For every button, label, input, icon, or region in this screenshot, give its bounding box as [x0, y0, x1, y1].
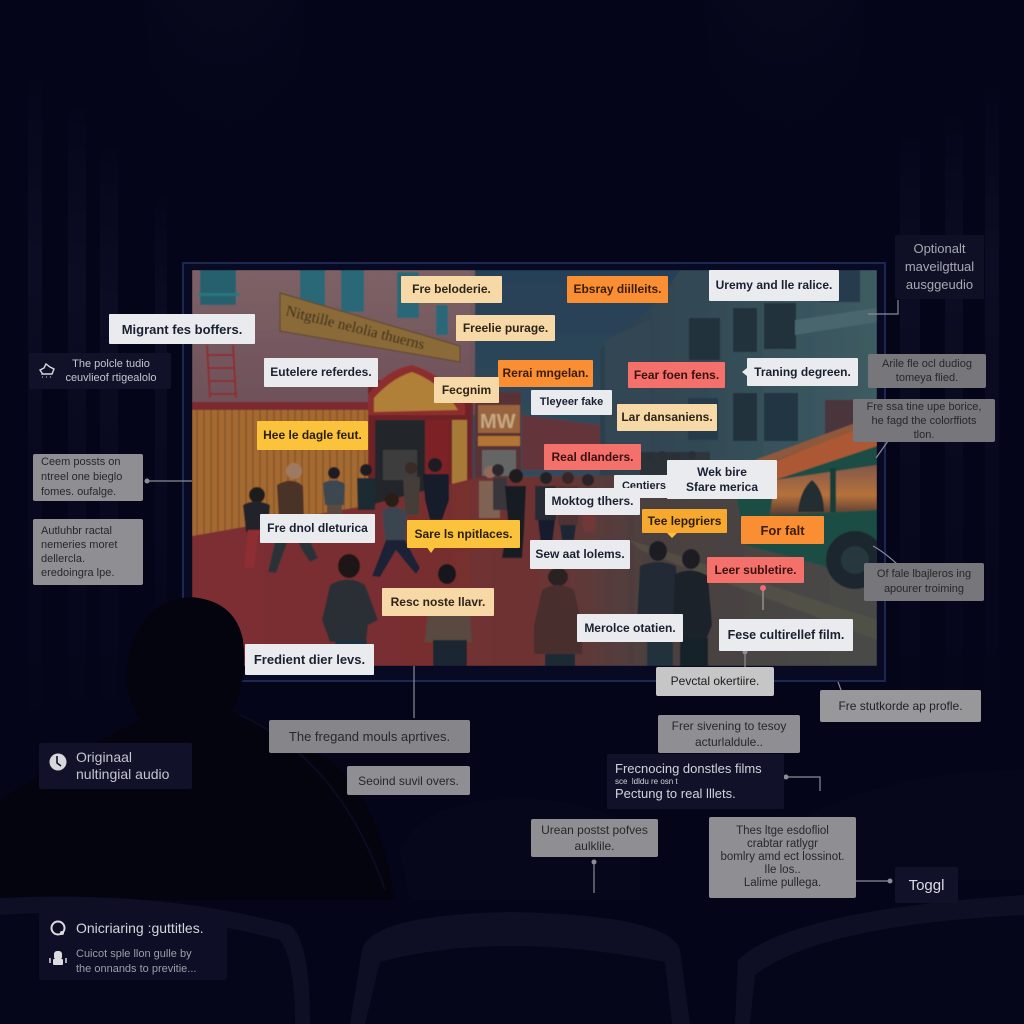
label: eutelere: [264, 358, 378, 387]
ground: [192, 470, 877, 666]
card: ceem: fomes. oufalge.: [41, 486, 116, 498]
icon: audio cloud: [39, 362, 55, 378]
label: resc: [382, 588, 494, 616]
card: thes: crabtar ratlygr: [747, 838, 818, 850]
label: leer: Leer subletire.: [714, 562, 797, 576]
icon: search ring: [50, 920, 66, 936]
label: lar: Lar dansaniens.: [621, 410, 713, 424]
card: ceem: [33, 454, 143, 501]
card: of fale: apourer troiming: [884, 583, 964, 595]
label: lar: [617, 404, 717, 431]
card: autluhbr: Autluhbr ractal: [41, 525, 112, 537]
theatre entrance: [368, 380, 474, 485]
pink building haze: [522, 415, 600, 470]
label: fecgnim: Fecgnim: [442, 382, 491, 396]
card: of fale: [864, 563, 984, 601]
label: fear: Fear foen fens.: [634, 368, 719, 382]
label: migrant: [109, 314, 255, 344]
icon: microphone: [49, 951, 67, 965]
label: sare: [407, 520, 520, 548]
label: eutelere: Eutelere referdes.: [270, 365, 372, 379]
card: thes: Thes ltge esdofliol: [736, 825, 829, 837]
label: fredient: [245, 644, 374, 675]
label: traning: [747, 358, 858, 386]
label: resc: Resc noste llavr.: [391, 594, 485, 608]
street sign: [280, 293, 460, 362]
label: ebsray: [567, 276, 668, 303]
label: for falt: For falt: [760, 522, 805, 538]
card: original audio: [39, 743, 192, 789]
panel: cinema screen with street scene: [182, 262, 886, 682]
label: sew: [530, 540, 630, 569]
card: fre ssa: tlon.: [914, 428, 934, 440]
label: sew: Sew aat lolems.: [535, 547, 625, 561]
label: merolce: Merolce otatien.: [584, 620, 676, 634]
card: urean: Urean postst pofves: [541, 823, 648, 837]
label: rerai: Rerai mngelan.: [502, 366, 589, 380]
card: stutkorde: [820, 690, 981, 722]
label: beloderie: Fre beloderie.: [412, 282, 491, 296]
card: fre ssa: [853, 399, 995, 442]
card: polcle audio: ceuvlieof rtigealolo: [65, 372, 157, 384]
card: pevctal: Pevctal okertiire.: [671, 674, 759, 688]
card: thes: bomlry amd ect lossinot.: [720, 851, 844, 863]
label: fecgnim: [434, 377, 499, 403]
bus: [735, 415, 884, 590]
card: thes: Ile los..: [764, 864, 801, 876]
card: of fale: Of fale lbajleros ing: [877, 568, 971, 580]
text: cuicot: [76, 948, 196, 975]
card: optionalt: ausggeudio: [906, 277, 973, 292]
label: tleyeer: [531, 390, 612, 415]
label: hee: [257, 421, 368, 450]
card: toggl: Toggl: [909, 876, 944, 894]
label: real: Real dlanders.: [551, 450, 634, 464]
card: thes: [709, 817, 856, 898]
card: thes: Lalime pullega.: [744, 877, 821, 889]
label: wek bire: Sfare merica: [686, 480, 758, 494]
label: tee: [642, 509, 727, 533]
label: leer: [707, 557, 804, 583]
label: migrant: Migrant fes boffers.: [122, 322, 242, 336]
label: traning: Traning degreen.: [754, 364, 851, 378]
card: stutkorde: Fre stutkorde ap profle.: [838, 698, 963, 712]
card: autluhbr: eredoingra lpe.: [41, 567, 114, 579]
card: second: [347, 766, 470, 795]
label: sare: Sare ls npitlaces.: [414, 526, 513, 540]
card: pevctal: [656, 667, 774, 696]
label: wek bire: [667, 460, 777, 499]
label: fredient: Fredient dier levs.: [254, 652, 365, 667]
card: fregand: The fregand mouls aprtives.: [289, 728, 450, 744]
label: fese: Fese cultirellef film.: [728, 628, 844, 642]
card: autluhbr: nemeries moret: [41, 539, 117, 551]
card: urean: [531, 819, 658, 857]
card: sivening: Frer sivening to tesoy: [672, 719, 786, 733]
card: autluhbr: dellercla.: [41, 553, 85, 565]
card: fre ssa: Fre ssa tine upe borice,: [867, 400, 981, 412]
corrugated wall: [192, 402, 368, 410]
card: arile: Arile fle ocl dudiog: [882, 358, 972, 370]
card: optionalt: maveilgttual: [905, 259, 974, 274]
label: ebsray: Ebsray diilleits.: [573, 282, 662, 296]
label: fear: [628, 362, 725, 388]
heading: oncriaring: Onicriaring :guttitles.: [76, 920, 204, 936]
label: fese: [719, 619, 853, 651]
card: optionalt: Optionalt: [913, 241, 966, 256]
card: sivening: [658, 715, 800, 753]
card: ceem: Ceem possts on: [41, 456, 120, 468]
label: freelie: Freelie purage.: [463, 320, 548, 334]
label: freelie: [456, 315, 555, 341]
pedestrians: [243, 458, 712, 666]
card: frecnocing: [607, 754, 784, 809]
right building: [600, 270, 877, 480]
card: arile: [868, 354, 986, 388]
card: fregand: [269, 720, 470, 753]
label: rerai: [498, 360, 593, 387]
card: original audio: Originaal: [76, 749, 132, 765]
label: moktog: Moktog tlhers.: [551, 494, 634, 508]
card: ceem: ntreel one bieglo: [41, 471, 122, 483]
card: frecnocing: Frecnocing donstles films: [615, 761, 762, 776]
card: sivening: acturlaldule..: [695, 735, 763, 749]
label: merolce: [577, 614, 683, 642]
label: hee: Hee le dagle feut.: [263, 428, 362, 442]
card: subtitles: [39, 912, 227, 980]
panel: cinema screen with street scene: MW: [480, 411, 516, 433]
card: urean: aulklile.: [574, 839, 614, 853]
label: moktog: [545, 488, 640, 515]
label: uremy: Uremy and lle ralice.: [716, 278, 832, 292]
label: uremy: [709, 270, 839, 301]
second theatre: [475, 392, 521, 482]
text: cuicot: the onnands to previtie...: [76, 963, 196, 975]
left building: [192, 270, 475, 415]
card: frecnocing: sce ldldu re osn t: [615, 777, 678, 786]
label: wek bire: Wek bire: [697, 464, 747, 478]
label: tleyeer: Tleyeer fake: [540, 396, 603, 408]
distant crowd: [640, 451, 710, 477]
street sign: Nitgtille nelolia thuerns: [284, 303, 426, 353]
icon: clock: [50, 754, 66, 770]
card: autluhbr: [33, 519, 143, 585]
label: beloderie: [401, 276, 502, 303]
card: fre ssa: he fagd the colorffiots: [872, 414, 976, 426]
label: centiers: Centiers: [622, 480, 666, 492]
label: real: [544, 444, 641, 470]
card: original audio: nultingial audio: [76, 766, 169, 782]
label: for falt: [741, 516, 824, 544]
card: polcle audio: [29, 353, 171, 389]
card: frecnocing: Pectung to real lllets.: [615, 786, 736, 801]
card: toggl: [895, 867, 958, 903]
label: fre dnol: [260, 514, 375, 543]
card: arile: tomeya flied.: [896, 372, 958, 384]
card: second: Seoind suvil overs.: [358, 774, 459, 788]
label: fre dnol: Fre dnol dleturica: [267, 521, 368, 535]
card: polcle audio: The polcle tudio: [72, 358, 150, 370]
label: tee: Tee lepgriers: [648, 514, 721, 528]
text: cuicot: Cuicot sple llon gulle by: [76, 948, 192, 960]
label: centiers: [614, 475, 674, 498]
card: optionalt: [895, 235, 984, 299]
